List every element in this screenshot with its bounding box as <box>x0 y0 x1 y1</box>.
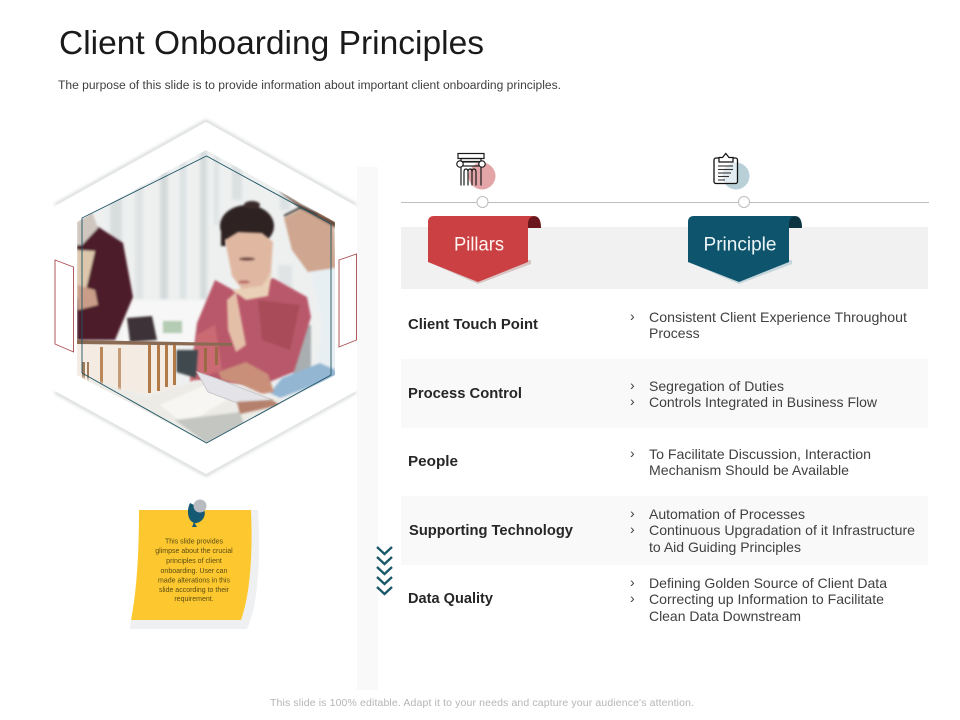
row: Data Quality: › <box>630 590 635 606</box>
row: Data Quality: Defining Golden Source of Client Data <box>649 575 887 591</box>
row: Supporting Technology: Continuous Upgradation of it Infrastructure <box>649 522 915 538</box>
ribbon: Principle <box>688 216 802 284</box>
row: Process Control: › <box>630 377 635 393</box>
row: Client Touch Point: Client Touch Point <box>408 317 538 333</box>
note text: slide according to their <box>159 587 230 594</box>
hexagon frame <box>55 121 356 475</box>
right red bracket <box>339 254 356 347</box>
row: Data Quality <box>408 574 887 624</box>
row: Process Control: Segregation of Duties <box>649 378 784 394</box>
note text: made alterations in this <box>158 578 230 584</box>
row: Process Control <box>408 377 878 410</box>
row: People: People <box>408 454 458 470</box>
footer note: This slide is 100% editable. Adapt it to your needs and capture your audience's attention. <box>270 697 694 709</box>
left red bracket <box>55 260 74 352</box>
ribbon: Pillars <box>428 216 541 284</box>
note text: onboarding. User can <box>161 568 228 575</box>
row: Client Touch Point: Process <box>649 325 700 341</box>
header band <box>401 227 928 289</box>
note text: glimpse about the crucial <box>155 548 233 555</box>
row: People: Mechanism Should be Available <box>649 462 849 478</box>
note text <box>155 538 233 603</box>
woman's face and hand <box>225 232 273 352</box>
note text: principles of client <box>166 558 222 565</box>
grey chair <box>293 325 311 375</box>
woman's blouse <box>190 278 311 385</box>
note shadow <box>130 510 259 629</box>
row: Data Quality: Correcting up Information to Facilitate <box>649 591 884 607</box>
timeline line with markers <box>401 196 929 208</box>
man with glasses <box>270 190 336 398</box>
grey table behind model <box>176 350 198 378</box>
photo: colleagues reviewing a tablet <box>70 145 340 445</box>
woman's hair <box>220 201 274 247</box>
row: Supporting Technology <box>409 505 915 555</box>
note text: requirement. <box>174 596 214 603</box>
icon: pillar column <box>457 154 496 190</box>
row: People: To Facilitate Discussion, Interaction <box>649 446 871 462</box>
shaded row backgrounds <box>401 359 928 565</box>
title: Client Onboarding Principles <box>59 24 484 61</box>
row: Client Touch Point: Consistent Client Experience Throughout <box>649 309 907 325</box>
row: Data Quality: Data Quality <box>408 591 493 607</box>
table surface and documents <box>77 375 285 443</box>
row: Process Control: Controls Integrated in Business Flow <box>649 394 878 410</box>
note paper <box>131 510 252 620</box>
subtitle: The purpose of this slide is to provide information about important client onboarding principles. <box>58 80 561 92</box>
row: Supporting Technology: Automation of Processes <box>649 506 805 522</box>
note text: This slide provides <box>165 538 223 546</box>
row: Process Control: › <box>630 393 635 409</box>
pin icon <box>188 500 206 527</box>
man in burgundy sweater <box>77 212 133 340</box>
row: People <box>408 445 871 478</box>
hand on tablet <box>218 362 274 394</box>
row: Client Touch Point <box>408 308 907 341</box>
row: Supporting Technology: Supporting Technology <box>409 523 573 539</box>
architectural model <box>77 340 232 397</box>
thin teal hexagon outline <box>82 156 331 443</box>
row: Data Quality: › <box>630 574 635 590</box>
row: Data Quality: Clean Data Downstream <box>649 608 801 624</box>
icon: clipboard <box>714 154 750 190</box>
row: Supporting Technology: › <box>630 521 635 537</box>
row: Client Touch Point: › <box>630 308 635 324</box>
tablet <box>197 372 273 404</box>
photo hexagon panel <box>55 121 356 475</box>
row: Process Control: Process Control <box>408 386 522 402</box>
row: Supporting Technology: › <box>630 505 635 521</box>
chevrons icon <box>377 547 392 594</box>
sticky note <box>130 500 259 629</box>
laptop <box>127 316 157 342</box>
row: People: › <box>630 445 635 461</box>
vertical light band <box>357 167 378 690</box>
ribbon: Pillars: Pillars <box>454 234 504 256</box>
ribbon: Principle: Principle <box>704 234 776 256</box>
row: Supporting Technology: to Aid Guiding Principles <box>649 539 801 555</box>
